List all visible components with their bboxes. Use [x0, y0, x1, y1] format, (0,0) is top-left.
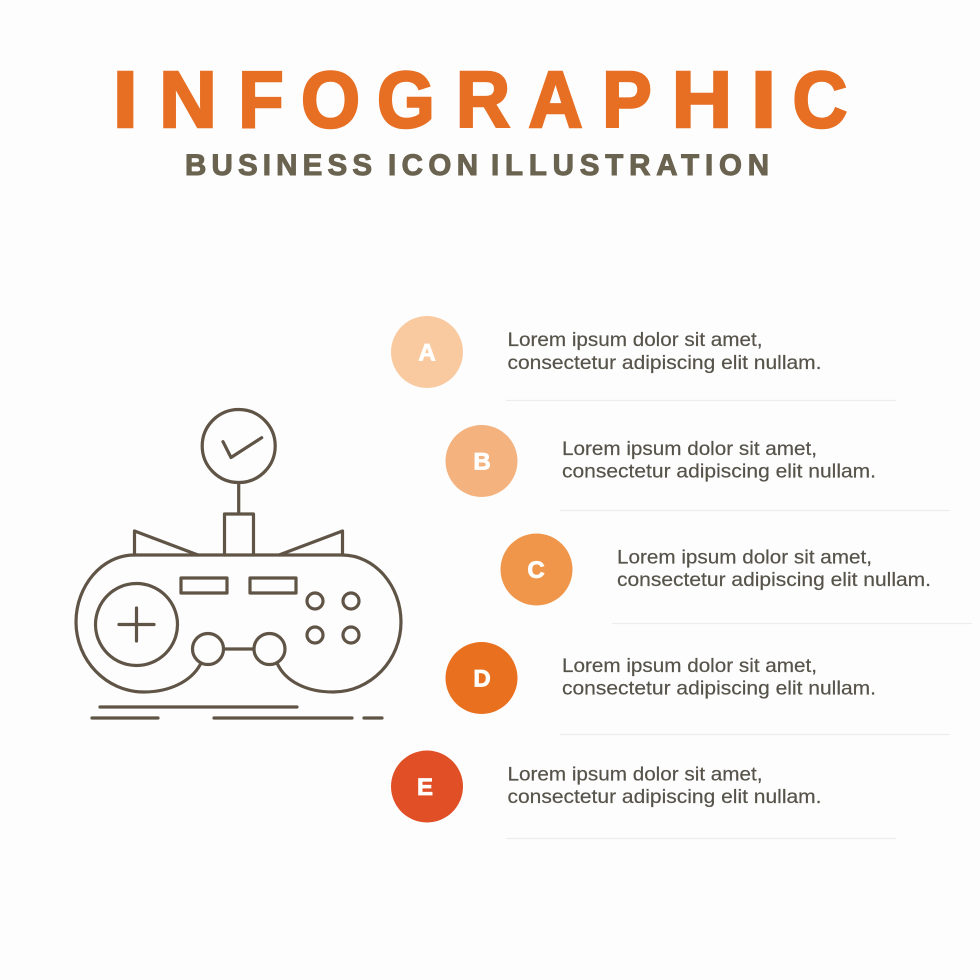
item A	[391, 316, 896, 400]
icon: game controller with check mark	[76, 410, 401, 718]
title: H	[672, 56, 732, 145]
title: O	[301, 54, 360, 144]
icon: d-pad	[96, 584, 178, 666]
title: C	[793, 54, 847, 144]
icon: action buttons	[307, 593, 359, 643]
text B	[562, 438, 876, 482]
item D	[446, 642, 950, 734]
text A	[508, 329, 822, 374]
text C: Lorem ipsum dolor sit amet,	[617, 546, 872, 568]
text C	[617, 546, 931, 591]
title: I	[751, 56, 776, 145]
letter C: C	[527, 557, 545, 584]
text B: consectetur adipiscing elit nullam.	[562, 460, 876, 482]
text E: Lorem ipsum dolor sit amet,	[508, 764, 762, 786]
text D: Lorem ipsum dolor sit amet,	[562, 655, 817, 677]
letter B: B	[473, 448, 491, 476]
icon: menu buttons	[181, 578, 296, 593]
icon: check circle	[202, 410, 275, 513]
title: F	[238, 56, 284, 145]
icon: joystick stem	[224, 514, 254, 555]
title: A	[528, 56, 583, 145]
text D: consectetur adipiscing elit nullam.	[562, 678, 876, 700]
letter A: A	[418, 340, 436, 366]
icon: controller body	[76, 555, 401, 692]
letter D: D	[473, 666, 491, 692]
badge E	[391, 750, 463, 822]
item B	[446, 425, 950, 510]
icon: left fin	[134, 531, 198, 555]
icon: analog sticks	[192, 634, 285, 664]
badge C	[500, 534, 572, 606]
text D	[562, 655, 876, 700]
text C: consectetur adipiscing elit nullam.	[617, 569, 931, 591]
text E: consectetur adipiscing elit nullam.	[508, 786, 822, 808]
text E	[508, 764, 822, 808]
subtitle: BUSINESS	[185, 149, 372, 182]
title: G	[377, 56, 435, 145]
subtitle	[185, 149, 769, 182]
text A: Lorem ipsum dolor sit amet,	[508, 329, 762, 351]
text A: consectetur adipiscing elit nullam.	[508, 352, 822, 374]
item E	[391, 750, 896, 838]
title: N	[159, 55, 217, 144]
subtitle: ILLUSTRATION	[491, 149, 769, 182]
icon: ground lines	[92, 707, 382, 718]
item C	[500, 534, 972, 624]
title: I	[113, 56, 138, 145]
badge D	[446, 642, 518, 714]
title	[113, 54, 847, 145]
icon: right fin	[279, 531, 342, 555]
title: R	[456, 56, 510, 145]
badge A	[391, 316, 463, 388]
badge B	[446, 425, 518, 497]
letter E: E	[417, 774, 433, 801]
subtitle: ICON	[388, 149, 478, 182]
text B: Lorem ipsum dolor sit amet,	[562, 438, 817, 460]
title: P	[602, 56, 652, 145]
